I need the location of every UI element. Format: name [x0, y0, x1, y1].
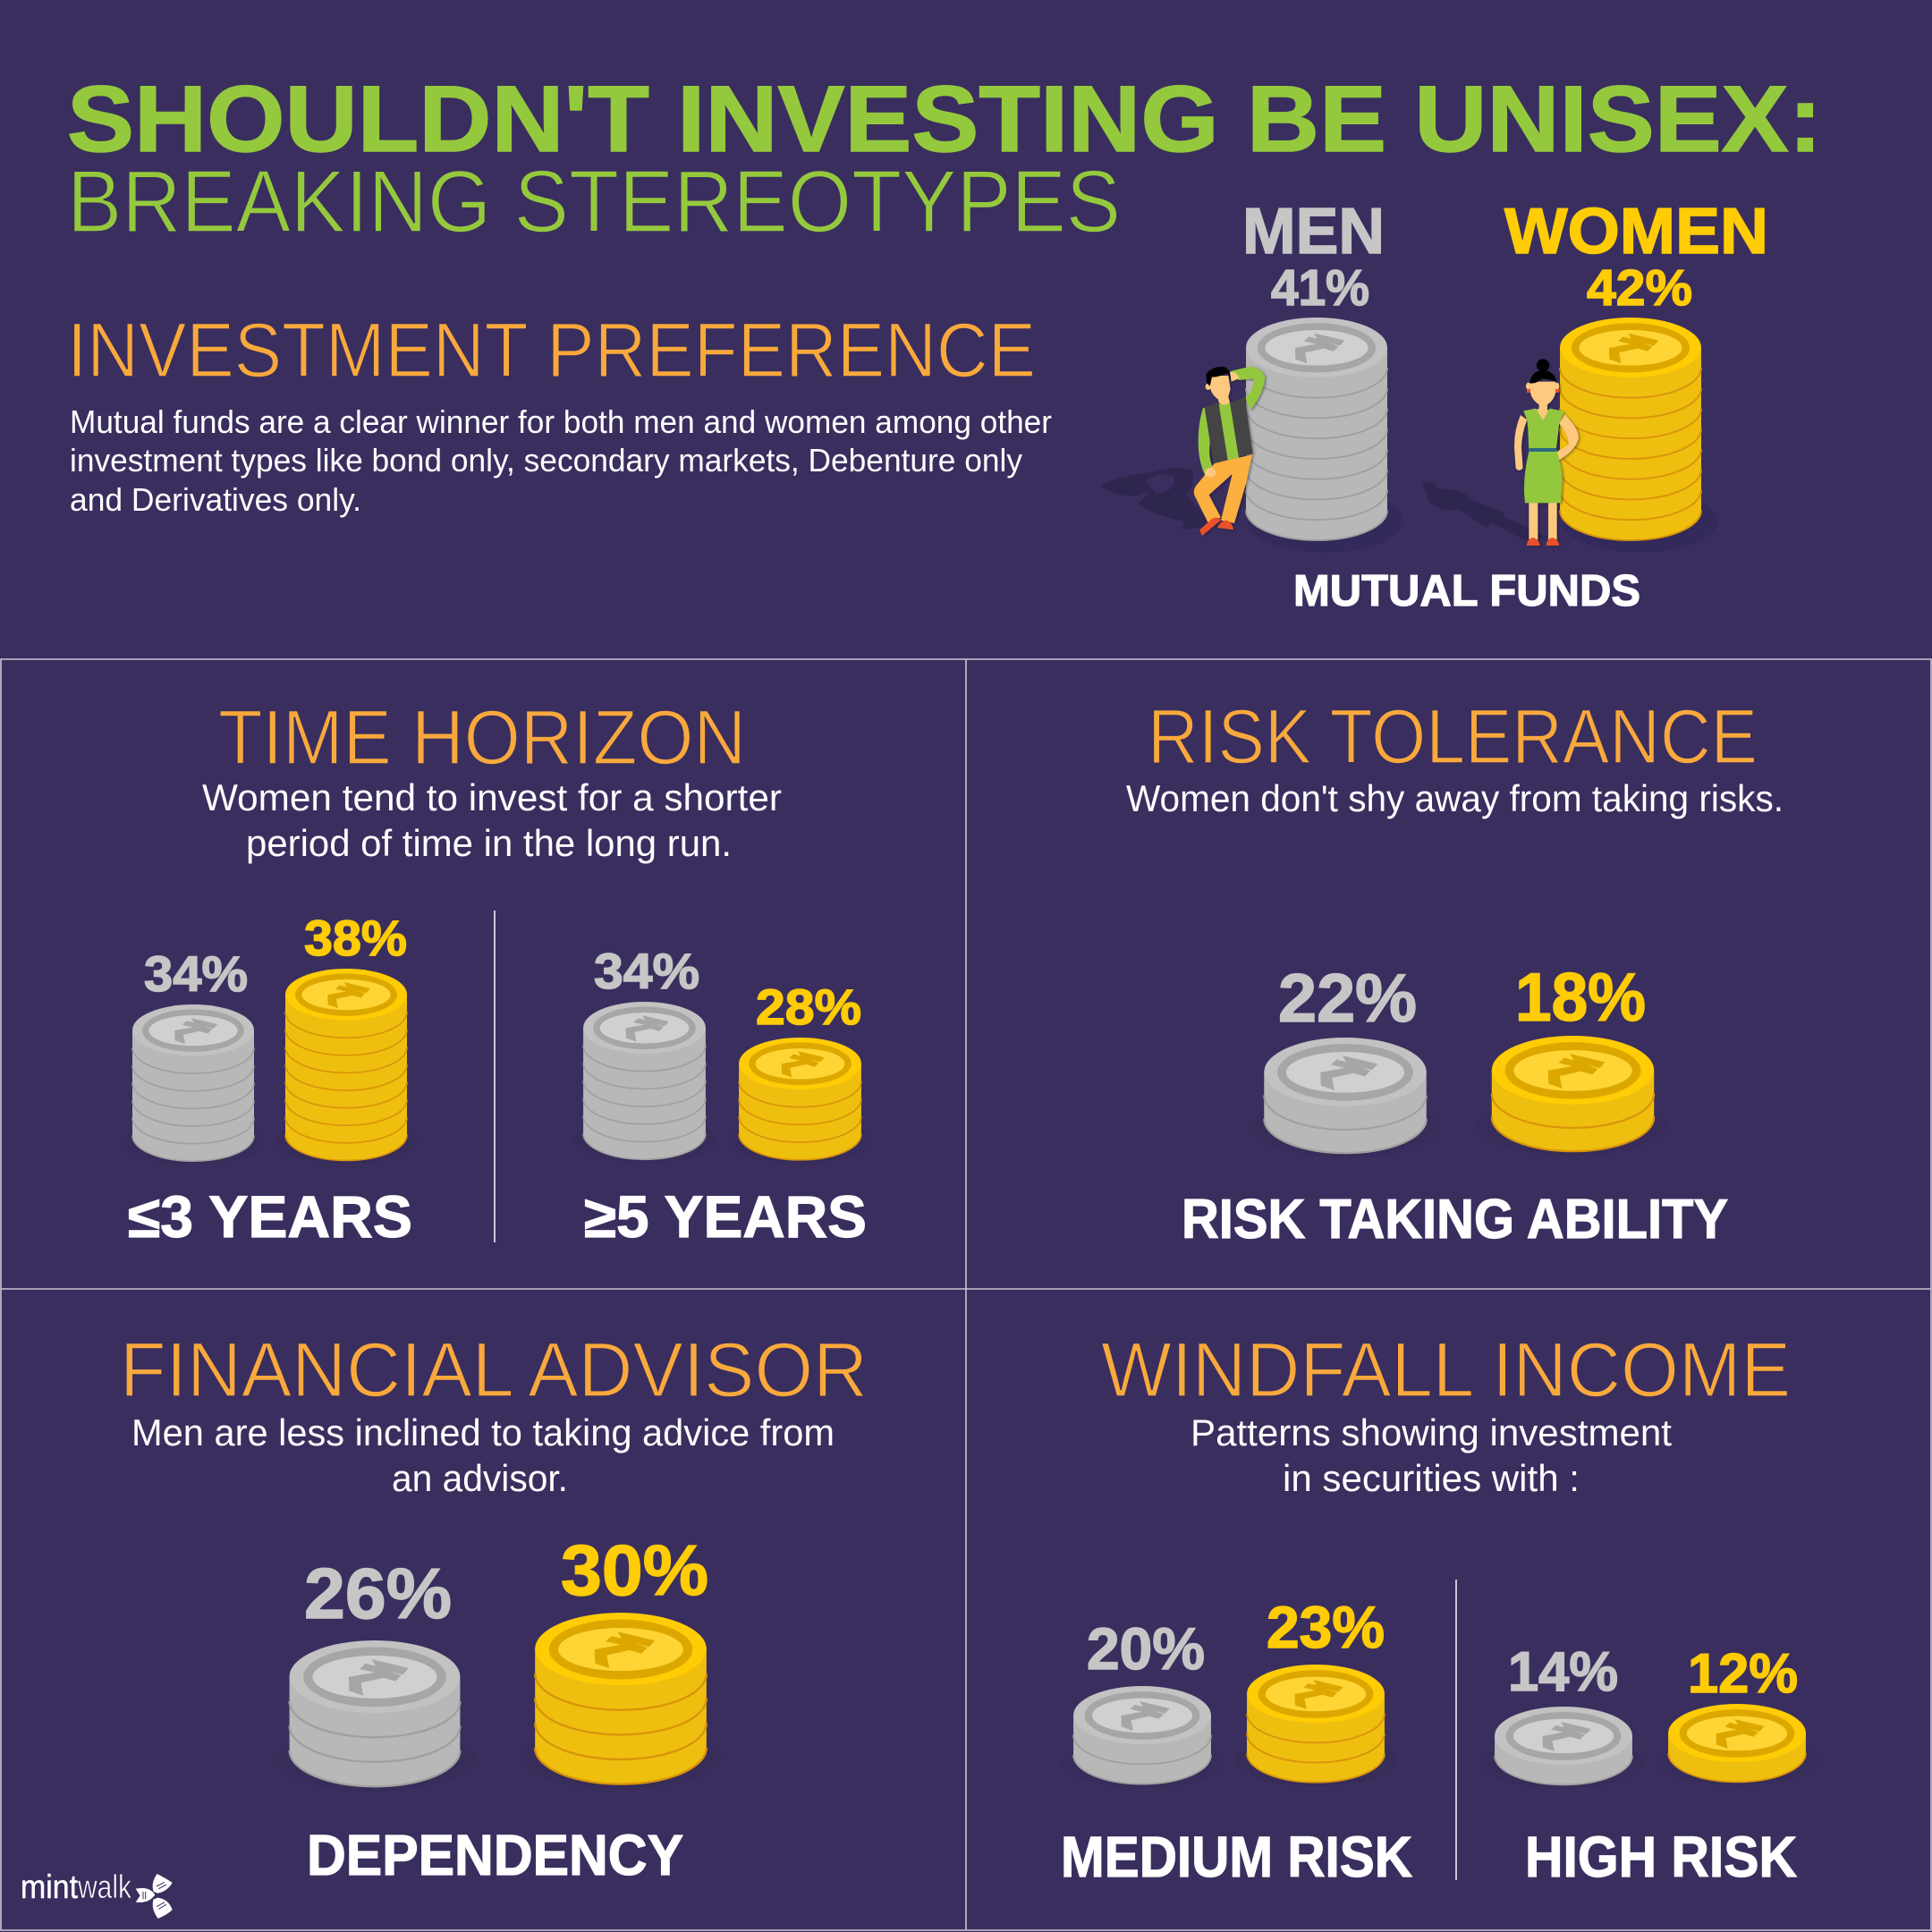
coin stack: women 18% [1477, 1036, 1669, 1157]
text block: windfall income description: in securities with : [1283, 1457, 1580, 1499]
text block: time horizon description: period of time in the long run. [246, 822, 732, 864]
value: women 12% high risk: 12% [1688, 1643, 1798, 1705]
logo: mintwalk: mint [21, 1868, 79, 1905]
coin stack: women 23% medium risk [1234, 1665, 1397, 1786]
text block: financial advisor description: Men are less inclined to taking advice from [131, 1411, 835, 1453]
value: men 41%: 41% [1271, 259, 1369, 317]
heading: financial advisor: FINANCIAL ADVISOR [120, 1327, 868, 1413]
text block: windfall income description [1191, 1411, 1672, 1499]
heading: time horizon: TIME HORIZON [218, 695, 746, 781]
heading: investment preference: INVESTMENT PREFERENCE [67, 308, 1036, 394]
coin stack: women 12% high risk [1656, 1704, 1818, 1786]
coin stack: men 34% short term [122, 1004, 265, 1165]
value: men 22%: 22% [1278, 961, 1417, 1037]
label: 5 years or more: ≥5 YEARS [584, 1183, 867, 1250]
text block: financial advisor description [131, 1411, 835, 1499]
subtitle: BREAKING STEREOTYPES [67, 152, 1121, 250]
label: 3 years or less: ≤3 YEARS [128, 1183, 412, 1250]
value: women 38% short term: 38% [304, 910, 407, 966]
coin stack: men 22% [1250, 1038, 1441, 1158]
logo: mintwalk: walk [77, 1868, 131, 1905]
text block: investment preference description [70, 403, 1052, 518]
value: men 34% short term: 34% [144, 945, 248, 1002]
label: medium risk: MEDIUM RISK [1061, 1825, 1412, 1889]
text block: investment preference description: Mutual funds are a clear winner for both men and women among other [70, 403, 1052, 440]
value: men 26%: 26% [304, 1554, 452, 1633]
panel: financial advisor [120, 1327, 868, 1887]
coin stack: men 14% high risk [1482, 1707, 1645, 1789]
coin stack: women mutual funds [1560, 318, 1717, 553]
text block: time horizon description [202, 776, 782, 864]
value: women 30%: 30% [561, 1530, 708, 1610]
figure: man leaning on stack [1100, 367, 1265, 536]
value: women 28% long term: 28% [756, 979, 861, 1035]
coin stack: men mutual funds [1246, 318, 1403, 553]
text block: windfall income description: Patterns showing investment [1191, 1411, 1672, 1453]
label: dependency: DEPENDENCY [307, 1823, 683, 1887]
label: women: WOMEN [1504, 196, 1768, 267]
label: mutual funds: MUTUAL FUNDS [1293, 567, 1640, 615]
label: risk taking ability: RISK TAKING ABILITY [1182, 1189, 1728, 1250]
value: women 23% medium risk: 23% [1267, 1594, 1385, 1660]
heading: windfall income: WINDFALL INCOME [1101, 1327, 1791, 1413]
coin stack: women 30% [520, 1613, 722, 1789]
panel: risk tolerance [1126, 694, 1784, 1250]
heading: risk tolerance: RISK TOLERANCE [1148, 694, 1758, 780]
text block: investment preference description: investment types like bond only, secondary markets, Debenture only [70, 442, 1022, 479]
coin stack: men 26% [274, 1640, 476, 1792]
text block: risk tolerance description: Women don't shy away from taking risks. [1126, 777, 1784, 819]
panel: time horizon [122, 695, 872, 1250]
coin stack: women 38% short term [275, 969, 418, 1164]
label: men: MEN [1242, 196, 1385, 267]
coin stack: women 28% long term [728, 1038, 872, 1164]
value: men 34% long term: 34% [594, 943, 699, 999]
coin stack: men 20% medium risk [1061, 1686, 1224, 1788]
coin stack: men 34% long term [572, 1002, 716, 1163]
panel: investment preference [67, 196, 1768, 615]
figure: woman beside stack [1422, 359, 1579, 546]
value: women 42%: 42% [1587, 259, 1692, 317]
text block: investment preference description: and Derivatives only. [70, 481, 361, 518]
value: men 14% high risk: 14% [1508, 1641, 1618, 1703]
text block: financial advisor description: an advisor. [392, 1457, 568, 1499]
panel: windfall income [1061, 1327, 1818, 1889]
value: men 20% medium risk: 20% [1087, 1615, 1205, 1682]
value: women 18%: 18% [1515, 960, 1646, 1036]
label: high risk: HIGH RISK [1525, 1825, 1797, 1889]
text block: time horizon description: Women tend to invest for a shorter [202, 776, 782, 818]
title: SHOULDN'T INVESTING BE UNISEX: [67, 67, 1822, 172]
logo: mintwalk [21, 1868, 173, 1919]
